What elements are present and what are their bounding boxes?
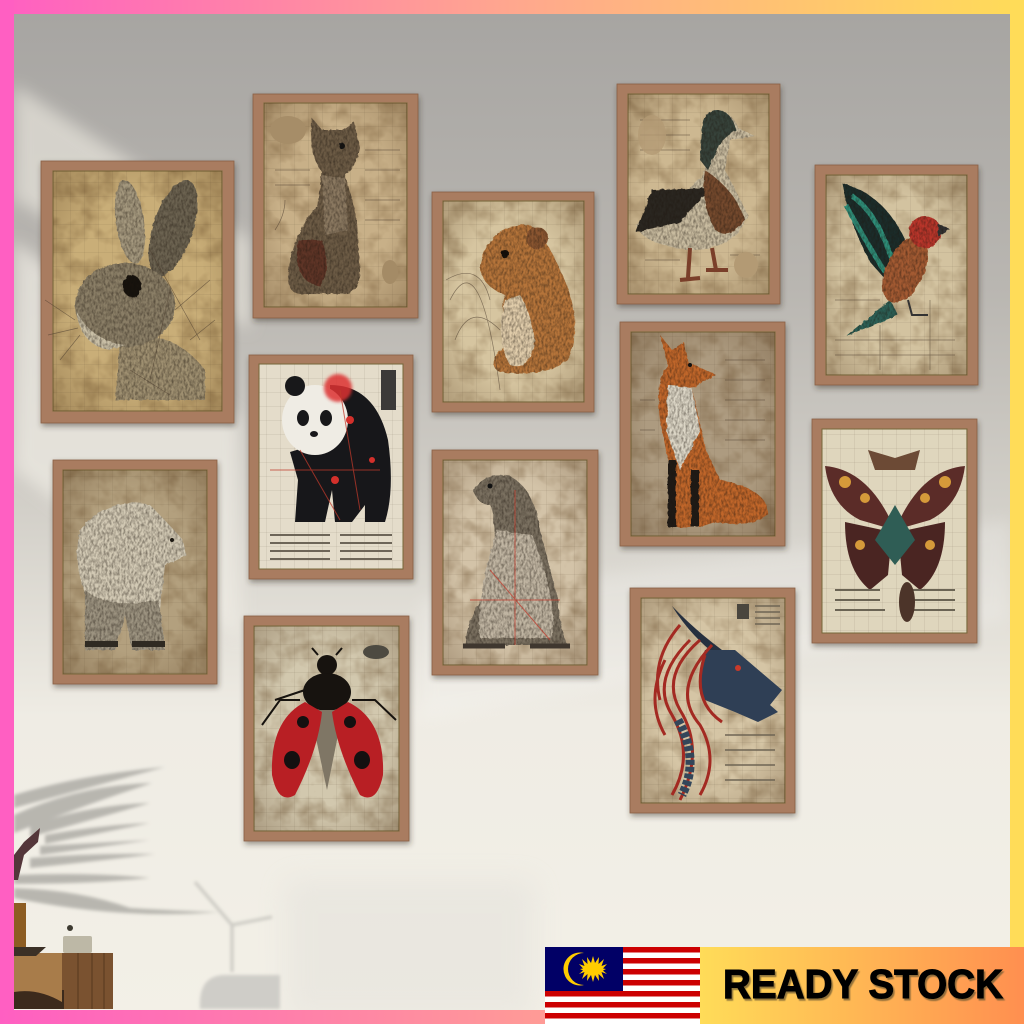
vase shadow	[195, 882, 280, 1009]
duck figure	[636, 110, 755, 250]
poster: cat	[253, 94, 418, 318]
poster: dragon	[630, 588, 795, 813]
fox figure	[659, 335, 768, 527]
ladybug figure	[262, 648, 396, 798]
poster: bird	[815, 165, 978, 385]
panda text block	[270, 535, 392, 559]
ready stock banner	[700, 947, 1024, 1024]
polar bear figure	[77, 503, 186, 650]
rabbit figure	[75, 174, 207, 400]
panda figure	[270, 374, 391, 522]
poster: duck	[617, 84, 780, 304]
palm leaf shadow	[14, 767, 220, 914]
poster: fox	[620, 322, 785, 546]
star	[579, 956, 607, 982]
cat figure	[288, 118, 360, 294]
Malaysian flag	[545, 947, 700, 1024]
dragon figure	[655, 606, 782, 800]
otter figure	[465, 475, 568, 645]
poster: hamster	[432, 192, 594, 412]
bird figure	[842, 183, 950, 336]
hamster figure	[480, 225, 575, 374]
poster: otter	[432, 450, 598, 675]
ready stock banner: READY STOCK	[723, 961, 1003, 1007]
poster: butterfly	[812, 419, 977, 643]
side table with decor	[14, 828, 113, 1009]
poster: rabbit	[41, 161, 234, 423]
poster: polar bear	[53, 460, 217, 684]
poster: panda	[249, 355, 413, 579]
crescent	[563, 952, 584, 986]
poster: ladybug	[244, 616, 409, 841]
butterfly wings	[825, 466, 965, 590]
